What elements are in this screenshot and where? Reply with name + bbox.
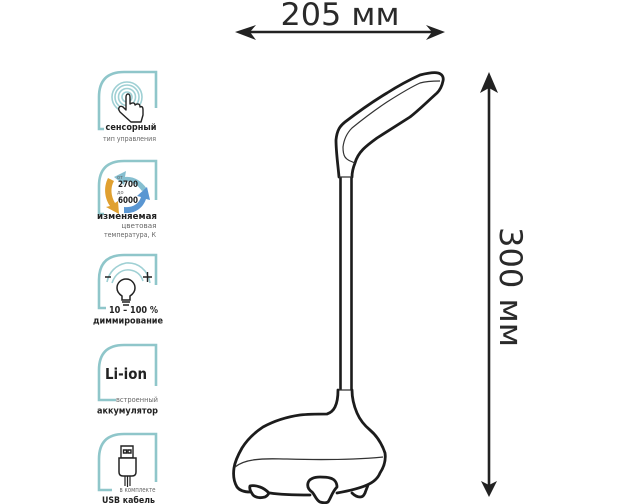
panel: battery — [97, 345, 158, 416]
icon: touch hand — [112, 82, 143, 122]
frame — [99, 72, 156, 129]
frame — [99, 345, 156, 400]
icon: cycle arrows — [105, 171, 150, 214]
width dimension — [235, 0, 445, 40]
caption: в комплекте — [120, 485, 156, 494]
caption: тип управления — [103, 134, 156, 143]
lamp base — [234, 390, 385, 495]
lamp head inner line — [343, 81, 440, 163]
value: 10 – 100 % — [109, 305, 159, 316]
heading: сенсорный — [106, 123, 156, 133]
lamp stem — [340, 177, 352, 390]
temperature values: 6000 — [118, 196, 138, 206]
width arrow — [240, 31, 440, 33]
temperature values: от — [117, 175, 123, 181]
frame — [99, 161, 156, 214]
panel: usb cable — [99, 434, 156, 504]
panel: dimming — [93, 255, 163, 326]
icon: usb plug — [119, 446, 136, 487]
heading: аккумулятор — [97, 406, 158, 416]
height label: 300 мм — [492, 227, 528, 347]
heading: изменяемая — [97, 212, 157, 222]
center foot — [308, 477, 337, 503]
height arrow — [488, 80, 490, 490]
base seam — [235, 457, 383, 467]
right foot — [352, 485, 368, 497]
left foot — [250, 486, 269, 498]
lamp illustration — [234, 73, 443, 503]
frame — [99, 255, 156, 308]
temperature values: до — [117, 190, 124, 196]
caption line 2: температура, К — [104, 230, 156, 239]
icon: light bulb — [117, 279, 135, 305]
height dimension — [480, 72, 528, 497]
Li-ion label: Li-ion — [105, 365, 147, 383]
panel: colour temperature — [97, 161, 157, 239]
panel: touch control — [99, 72, 156, 143]
temperature values — [117, 175, 138, 206]
icon: dimming arc — [105, 263, 152, 283]
lamp head — [336, 73, 443, 177]
caption: встроенный — [116, 395, 158, 404]
frame — [99, 434, 156, 490]
temperature values: 2700 — [118, 180, 138, 190]
caption: цветовая — [121, 221, 156, 230]
heading: диммирование — [93, 316, 163, 326]
